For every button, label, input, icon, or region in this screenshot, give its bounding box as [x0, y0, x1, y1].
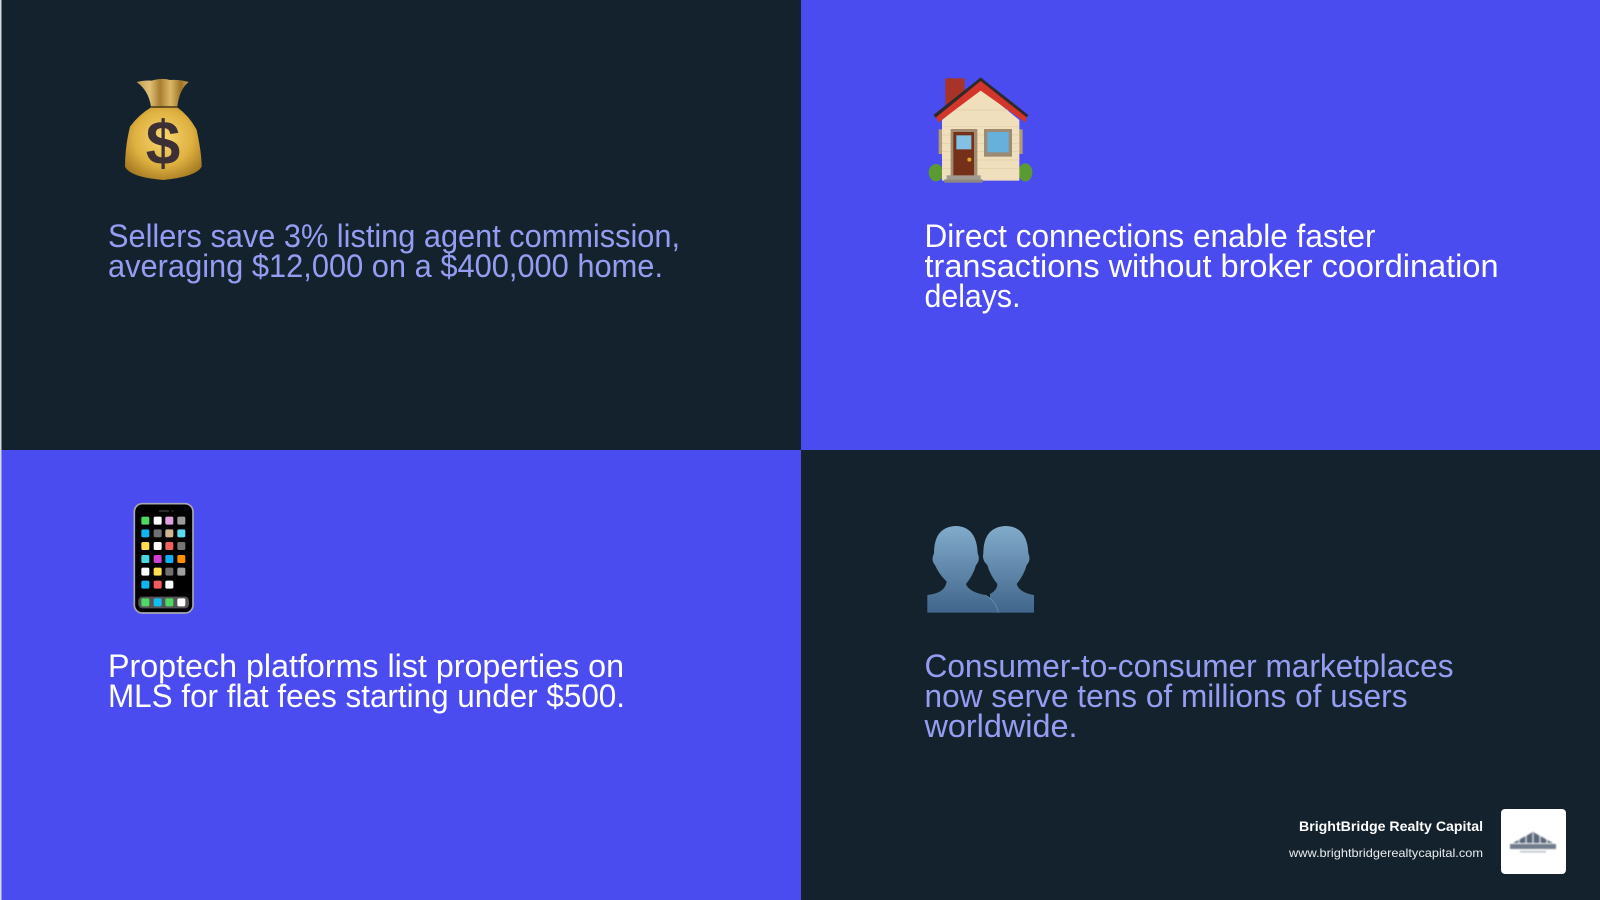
icon: money bag: $ [146, 110, 180, 179]
brand footer [1288, 809, 1566, 874]
text: direct connections: delays. [924, 278, 1020, 314]
text: consumer marketplaces: worldwide. [923, 708, 1078, 744]
text: direct connections: transactions without broker coordination [924, 248, 1498, 284]
text: direct connections: Direct connections enable faster [924, 218, 1376, 254]
text: consumer marketplaces: now serve tens of millions of users [924, 678, 1408, 714]
text: proptech platforms: MLS for flat fees starting under $500. [108, 678, 625, 714]
text: seller savings: averaging $12,000 on a $400,000 home. [108, 248, 663, 284]
icon: house [929, 77, 1032, 183]
website address: www.brightbridgerealtycapital.com [1288, 846, 1483, 860]
text: consumer marketplaces: Consumer-to-consumer marketplaces [924, 648, 1454, 684]
text: proptech platforms: Proptech platforms list properties on [108, 648, 624, 684]
panel: proptech platforms [0, 450, 801, 900]
text: seller savings: Sellers save 3% listing agent commission, [108, 218, 680, 254]
icon: two people silhouettes [927, 526, 1034, 613]
left edge line [0, 0, 2, 900]
panel: direct connections [801, 0, 1600, 450]
icon: smartphone [134, 504, 193, 613]
brand name: BrightBridge Realty Capital [1299, 818, 1483, 834]
icon: money bag [125, 79, 202, 180]
panel: consumer marketplaces [801, 450, 1600, 900]
panel: seller savings [0, 0, 801, 450]
logo tile [1501, 809, 1566, 874]
